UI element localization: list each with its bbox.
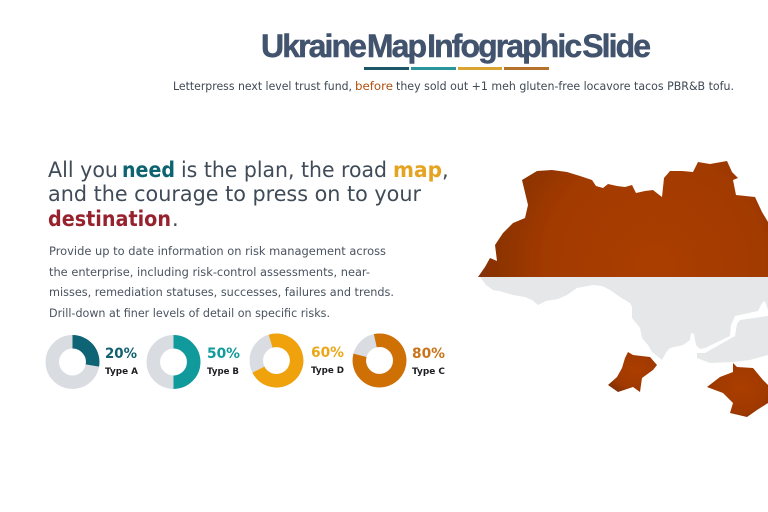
subtitle <box>173 79 734 93</box>
donut: Type B 50% <box>153 342 240 382</box>
donut: Type D 60%: 60% <box>311 345 344 361</box>
donut: Type A 20% <box>52 342 139 382</box>
heading: and the courage to press on to your <box>48 182 421 206</box>
title accent bars <box>364 67 549 70</box>
body paragraph: Provide up to date information on risk management across <box>49 245 386 258</box>
heading: , <box>442 158 449 182</box>
map: red upper band <box>478 161 768 277</box>
title: Ukraine Map Infographic Slide <box>261 28 651 64</box>
map: grey lower mainland <box>480 277 768 360</box>
subtitle: they sold out +1 meh gluten-free locavore tacos PBR&B tofu. <box>396 79 734 93</box>
map: red Crimea <box>707 363 768 417</box>
body paragraph: misses, remediation statuses, successes, failures and trends. <box>49 286 394 299</box>
body paragraph: the enterprise, including risk-control assessments, near- <box>49 266 370 279</box>
donut: Type A 20%: Type A <box>105 366 139 377</box>
heading: destination <box>48 207 171 231</box>
subtitle: Letterpress next level trust fund, <box>173 79 352 93</box>
heading: is the plan, the road <box>181 158 387 182</box>
body paragraph <box>49 245 394 320</box>
heading: need <box>122 158 175 182</box>
body paragraph: Drill-down at finer levels of detail on specific risks. <box>49 307 330 320</box>
donut: Type D 60% <box>256 340 344 381</box>
heading <box>48 158 449 231</box>
map: grey eastern coast <box>697 316 768 363</box>
donut: Type B 50%: 50% <box>207 346 240 362</box>
heading: map <box>393 158 442 182</box>
donut: Type D 60%: Type D <box>311 365 344 376</box>
subtitle: before <box>355 79 393 93</box>
donut: Type B 50%: Type B <box>207 366 239 377</box>
heading: All you <box>48 158 118 182</box>
donut: Type C 80% <box>359 340 445 381</box>
donut: Type A 20%: 20% <box>105 346 137 362</box>
heading: . <box>172 207 179 231</box>
map of Ukraine <box>478 161 768 417</box>
map: red western peninsula <box>608 352 657 392</box>
donut: Type C 80%: 80% <box>412 346 445 362</box>
donut: Type C 80%: Type C <box>412 366 445 377</box>
